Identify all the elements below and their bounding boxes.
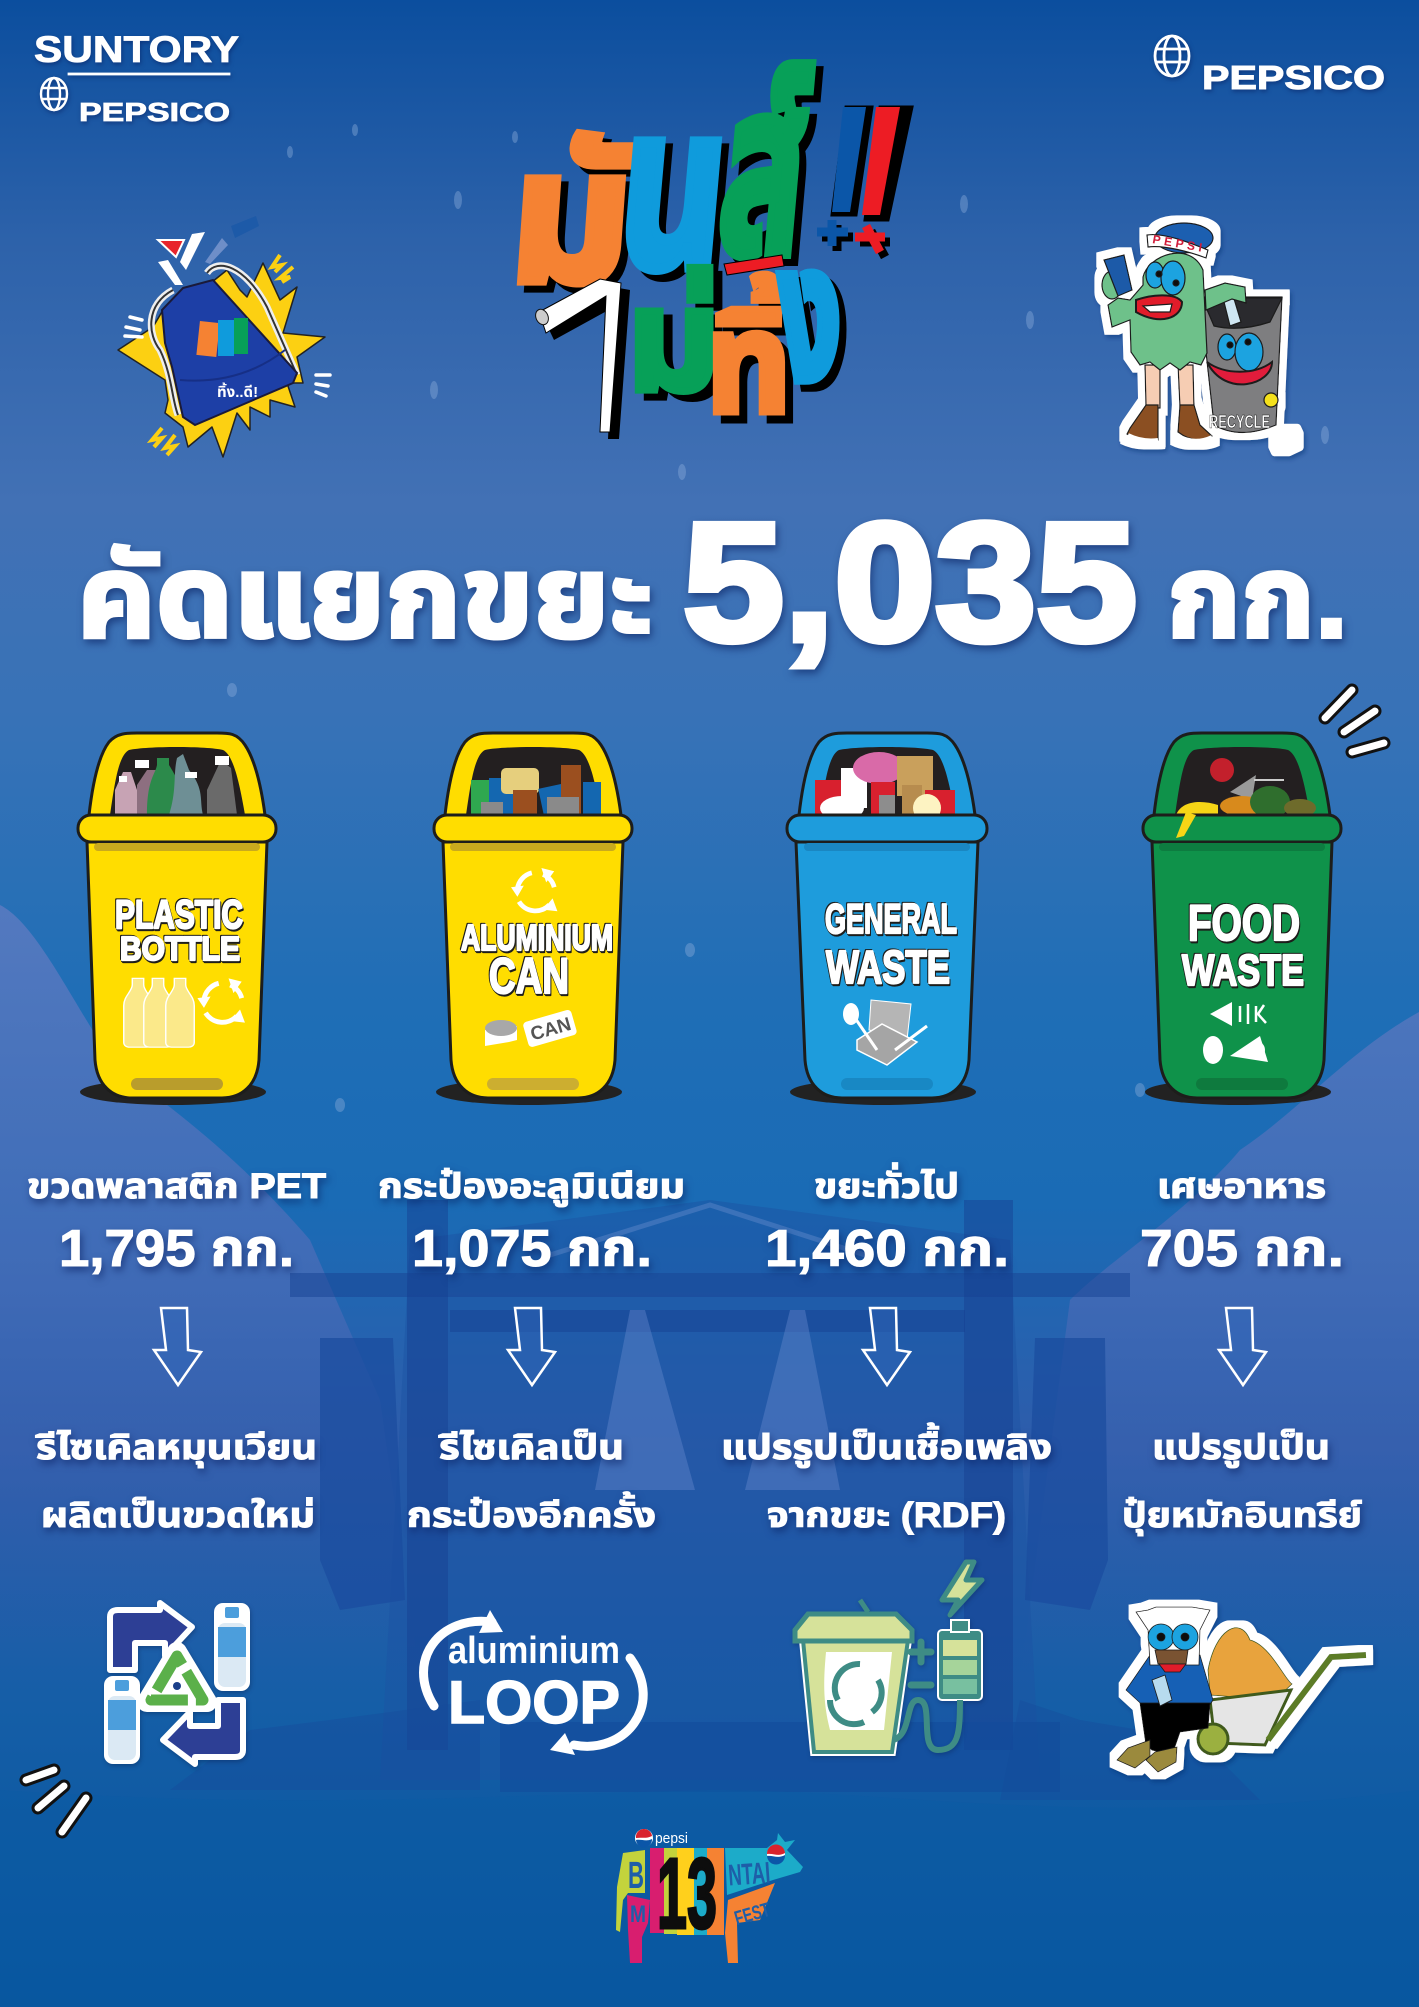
outcome: แปรรูปเป็น [1152, 1428, 1330, 1468]
bin label: WASTE [826, 941, 950, 993]
rim shadow [94, 843, 260, 851]
globe [1155, 36, 1189, 76]
trash bin [1200, 297, 1282, 432]
category label: ขยะทั่วไป [814, 1162, 959, 1206]
amount: 705 กก. [1140, 1220, 1344, 1278]
bottle icons [124, 978, 194, 1047]
category label: ขวดพลาสติก PET [27, 1167, 326, 1206]
outcome line 2: ผลิตเป็นขวดใหม่ [41, 1496, 315, 1535]
black shadow layer [511, 42, 912, 450]
cable [893, 1700, 960, 1750]
fish bone and food icons [1203, 1002, 1268, 1064]
graffiti title: มันส์ ไม่ทิ้ง [504, 35, 912, 450]
cow lettering: FEST [732, 1899, 773, 1930]
black shadow layer: ทิ้ [714, 282, 799, 450]
bottle entering bin [1222, 292, 1241, 326]
illustration: cow with compost wheelbarrow [1117, 1607, 1366, 1772]
arrow: PET [154, 1308, 201, 1385]
food box icon [843, 1000, 927, 1065]
column: PET [27, 1167, 326, 1535]
outcome line 2: กระป๋องอีกครั้ง [407, 1491, 656, 1535]
bin rim [787, 815, 987, 842]
bag pocket line [180, 350, 285, 381]
handle slot [487, 1078, 579, 1090]
amount: 1,460 กก. [765, 1220, 1009, 1278]
recycle in bin [830, 1664, 882, 1724]
outcome line 2: จากขยะ (RDF) [767, 1496, 1006, 1535]
outcome line 2: ปุ๋ยหมักอินทรีย์ [1122, 1496, 1362, 1536]
arrow: general waste [863, 1308, 910, 1385]
unit: กก. [1167, 532, 1348, 662]
letter no: น [611, 62, 738, 316]
column: general waste [721, 1162, 1052, 1535]
upper arrow [110, 1603, 192, 1670]
straw [533, 279, 630, 439]
mouth [1159, 1664, 1186, 1672]
icon: recycled bottles [104, 1603, 250, 1764]
category label: กระป๋องอะลูมิเนียม [378, 1167, 685, 1207]
category label: เศษอาหาร [1157, 1167, 1326, 1206]
black shadow layer: น [618, 69, 745, 323]
arrow: food waste [1219, 1308, 1266, 1385]
monster arm and hand [1205, 283, 1246, 310]
bin rim [78, 815, 276, 842]
illustration: mascot with recycle bin [1102, 223, 1298, 451]
recycle icon [511, 868, 557, 911]
bolt [942, 1562, 982, 1615]
food scraps in bin [1176, 758, 1316, 818]
illustration: drawstring bag [118, 216, 330, 457]
cow sweater [1126, 1655, 1213, 1712]
bin face [1207, 333, 1278, 407]
bin label: FOOD [1188, 895, 1300, 951]
letter ma second: ม่ [627, 260, 720, 421]
cans in bin [471, 765, 601, 818]
monster mouth [1136, 295, 1182, 319]
cap [1155, 223, 1213, 253]
arrow: aluminium [508, 1308, 555, 1385]
pepsi sponsor mark: pepsi [655, 1830, 688, 1847]
exclamation marks [832, 107, 900, 215]
total heading [77, 488, 1348, 676]
rim shadow [450, 843, 616, 851]
letter ngo: ง [778, 207, 841, 422]
wheel [1198, 1724, 1228, 1754]
rim shadow [1159, 843, 1325, 851]
hand [1102, 271, 1122, 299]
bin label [1182, 895, 1304, 995]
wordmark bottom: LOOP [448, 1669, 620, 1736]
legs [1145, 365, 1194, 408]
icon: refuse-derived fuel [795, 1562, 982, 1752]
spark marks [125, 317, 330, 396]
bottle right [214, 1603, 250, 1691]
cow lettering [628, 1855, 773, 1930]
PepsiCo globe small [41, 78, 67, 110]
red bar [724, 255, 784, 275]
banana peel on rim [1176, 812, 1196, 838]
can [1104, 255, 1132, 296]
black shadow layer: ม่ [636, 267, 729, 428]
can icons: CAN [528, 1014, 574, 1045]
yellow burst [118, 263, 325, 457]
cow eyes [1148, 1624, 1198, 1650]
bin shell [436, 733, 623, 1105]
muzzle [1155, 1650, 1188, 1664]
sticker group [1102, 223, 1298, 451]
background: mountains [0, 905, 1419, 1680]
cap text: PEPSI [1151, 232, 1203, 255]
background: dust particles [227, 124, 1329, 1112]
bottle left [104, 1676, 140, 1764]
monster body [1108, 253, 1207, 370]
handle slot [131, 1078, 223, 1090]
Suntory wordmark: SUNTORY [34, 29, 239, 70]
battery [938, 1620, 982, 1700]
wordmark top: aluminium [448, 1630, 620, 1672]
trash flying [158, 240, 184, 257]
PepsiCo wordmark: PEPSICO [79, 97, 230, 127]
outcome: แปรรูปเป็นเชื้อเพลิง [721, 1422, 1052, 1468]
outcome: รีไซเคิลหมุนเวียน [35, 1428, 317, 1468]
cow lettering: NTAI [727, 1857, 771, 1892]
bin shell [80, 733, 267, 1105]
barrow [1210, 1690, 1291, 1745]
monster eyes [1146, 261, 1185, 295]
total number: 5,035 [683, 488, 1137, 676]
bin label [115, 893, 243, 967]
amount: 1,075 กก. [412, 1220, 652, 1278]
bin label: CAN [489, 948, 569, 1004]
black shadow layer: ง [785, 214, 848, 429]
bag handles [151, 266, 297, 415]
bag text: ทิ้ง..ดี! [217, 382, 258, 401]
pepsi sponsor mark [635, 1829, 688, 1847]
cow lettering: M [630, 1901, 646, 1928]
cow lettering: B [628, 1855, 644, 1897]
black shadow layer: ส์ [718, 42, 824, 311]
amount: 1,795 กก. [59, 1220, 294, 1278]
bin label: PLASTIC [115, 893, 243, 937]
background: festival stage [0, 1200, 1419, 2007]
bin rim [1143, 815, 1341, 842]
crosses [817, 220, 890, 257]
motion marks bottom left [26, 1770, 86, 1832]
spark bolts [152, 255, 293, 455]
icon: aluminium loop [424, 1610, 643, 1755]
bag body [162, 280, 297, 425]
colored cow body [616, 1833, 803, 1963]
heading label: คัดแยกขยะ [77, 532, 653, 662]
bin label [461, 917, 613, 1004]
handle slot [841, 1078, 933, 1090]
bin shell [1145, 733, 1332, 1105]
bottle [1152, 1675, 1172, 1706]
loop arrows [424, 1621, 643, 1746]
recycle symbol [147, 1652, 207, 1702]
sole strip [1128, 435, 1212, 441]
plus and minus [911, 1642, 931, 1685]
cow pants [1140, 1703, 1210, 1755]
bag logo [196, 318, 248, 357]
wordmark: PEPSICO [1202, 59, 1385, 96]
trash in bin [815, 752, 955, 822]
bin: food waste [1143, 733, 1341, 1105]
bin label: BOTTLE [120, 930, 240, 967]
lower arrow [163, 1700, 243, 1764]
can icons [485, 1009, 578, 1048]
bin: aluminium can [434, 733, 632, 1105]
number 13: 13 [657, 1838, 717, 1950]
boots [1127, 405, 1212, 440]
handle slot [1196, 1078, 1288, 1090]
bin rim [434, 815, 632, 842]
bin label [825, 895, 957, 993]
bin label: WASTE [1182, 946, 1304, 995]
column: aluminium [378, 1167, 685, 1535]
boots [1117, 1740, 1177, 1772]
logo: Pepsi Bangkok 13 festival [616, 1829, 803, 1963]
barrow handle [1268, 1655, 1366, 1740]
bin: plastic bottle [78, 733, 276, 1105]
motion marks top right [1325, 690, 1384, 752]
rim shadow [804, 843, 970, 851]
letter ma: มั [504, 113, 647, 321]
bin label: ALUMINIUM [461, 917, 613, 958]
cow head [1136, 1607, 1210, 1665]
logo: Suntory PepsiCo [34, 29, 239, 127]
bin shell [790, 733, 978, 1105]
black shadow layer: มั [511, 120, 654, 328]
bin label: RECYCLE [1209, 412, 1270, 432]
bottles in bin [115, 754, 237, 815]
letter tho: ทิ้ [706, 274, 791, 442]
bin: general waste [787, 733, 987, 1105]
outcome: รีไซเคิลเป็น [438, 1428, 624, 1467]
cup bin [803, 1640, 908, 1752]
compost pile [1208, 1628, 1292, 1700]
small tag [1274, 429, 1298, 451]
column: food waste [1122, 1167, 1362, 1536]
logo: PepsiCo top right [1155, 36, 1385, 96]
letter so: ส์ [711, 35, 817, 304]
recycle icon [197, 978, 245, 1023]
bin label: GENERAL [825, 895, 957, 942]
